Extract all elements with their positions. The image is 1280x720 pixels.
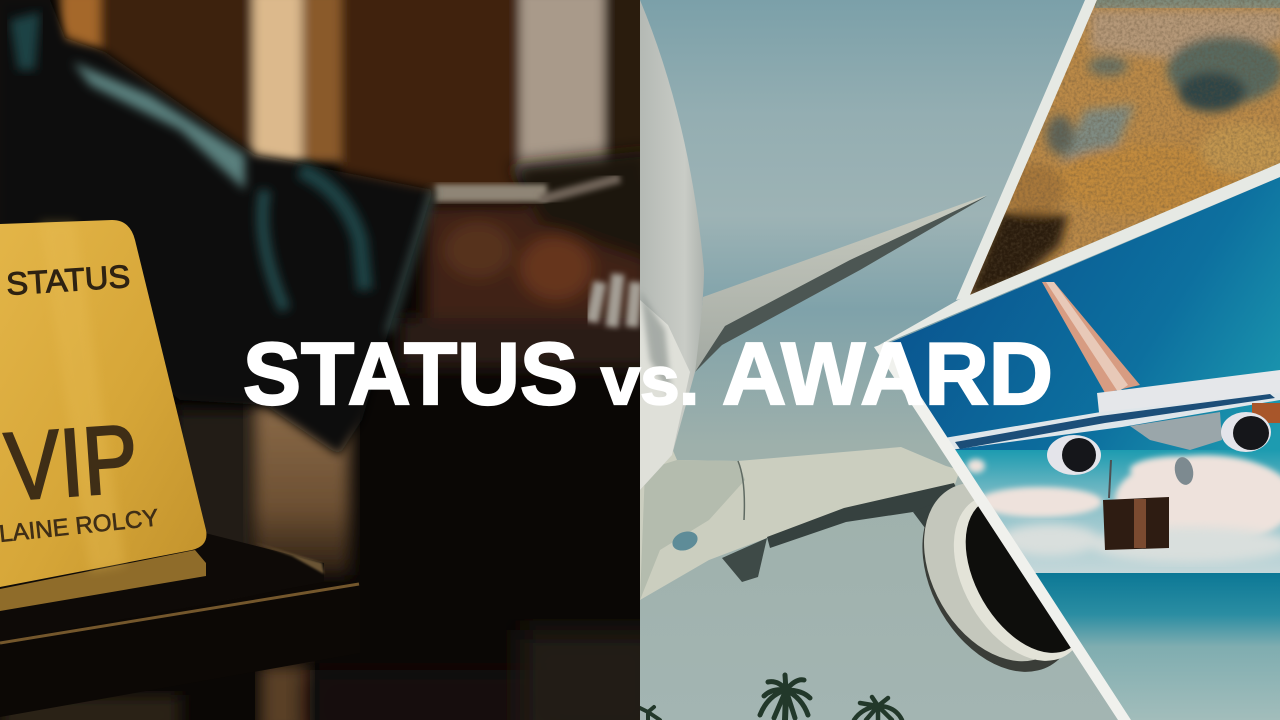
table: [0, 533, 360, 717]
title word: vs.: vs.: [601, 343, 699, 419]
sleeve and arm: [0, 0, 650, 455]
clouds: [967, 455, 1280, 545]
white shirt cuff: [435, 184, 547, 202]
sleeve highlight: [73, 62, 245, 190]
card sheen: [40, 222, 125, 572]
airliner stripe: [955, 394, 1275, 449]
background window light: [60, 0, 650, 210]
sea: [1036, 573, 1280, 720]
orange engine pylon: [1252, 403, 1280, 423]
palm trees: [640, 675, 902, 720]
fuselage: [640, 0, 704, 490]
fingers: [592, 274, 636, 327]
airliner fuselage: [1097, 370, 1280, 412]
panel: status photo (left half): [0, 0, 660, 720]
lower wing: [640, 447, 958, 600]
cargo box: [1103, 460, 1169, 550]
icon: gold VIP card: [0, 220, 206, 587]
forearm and hand: [400, 150, 650, 368]
cargo net: [1174, 457, 1194, 485]
panel: plane over sea photo (lower right): [870, 163, 1280, 720]
landing gear: [1130, 412, 1222, 450]
airliner wing: [947, 398, 1280, 450]
panel: landscape photo (upper right): [956, 0, 1280, 300]
panel: award photo (right half): [640, 0, 1280, 720]
cuff folds: [262, 170, 433, 333]
airliner engines: [1047, 412, 1271, 475]
title: [243, 324, 1053, 423]
upper winglet wing: [695, 195, 987, 372]
card label: airline policy: LAINE ROLCY: [0, 504, 160, 548]
title word: STATUS: STATUS: [243, 324, 578, 423]
engine: [922, 484, 1072, 672]
card label: VIP: VIP: [2, 405, 141, 521]
title word: AWARD: AWARD: [722, 324, 1053, 423]
card label: status: STATUS: [5, 258, 131, 302]
white photo borders: [874, 163, 1280, 348]
background below the sleeve: [0, 405, 660, 720]
tail fin: [1042, 282, 1140, 393]
dark sleeve: [52, 4, 438, 459]
